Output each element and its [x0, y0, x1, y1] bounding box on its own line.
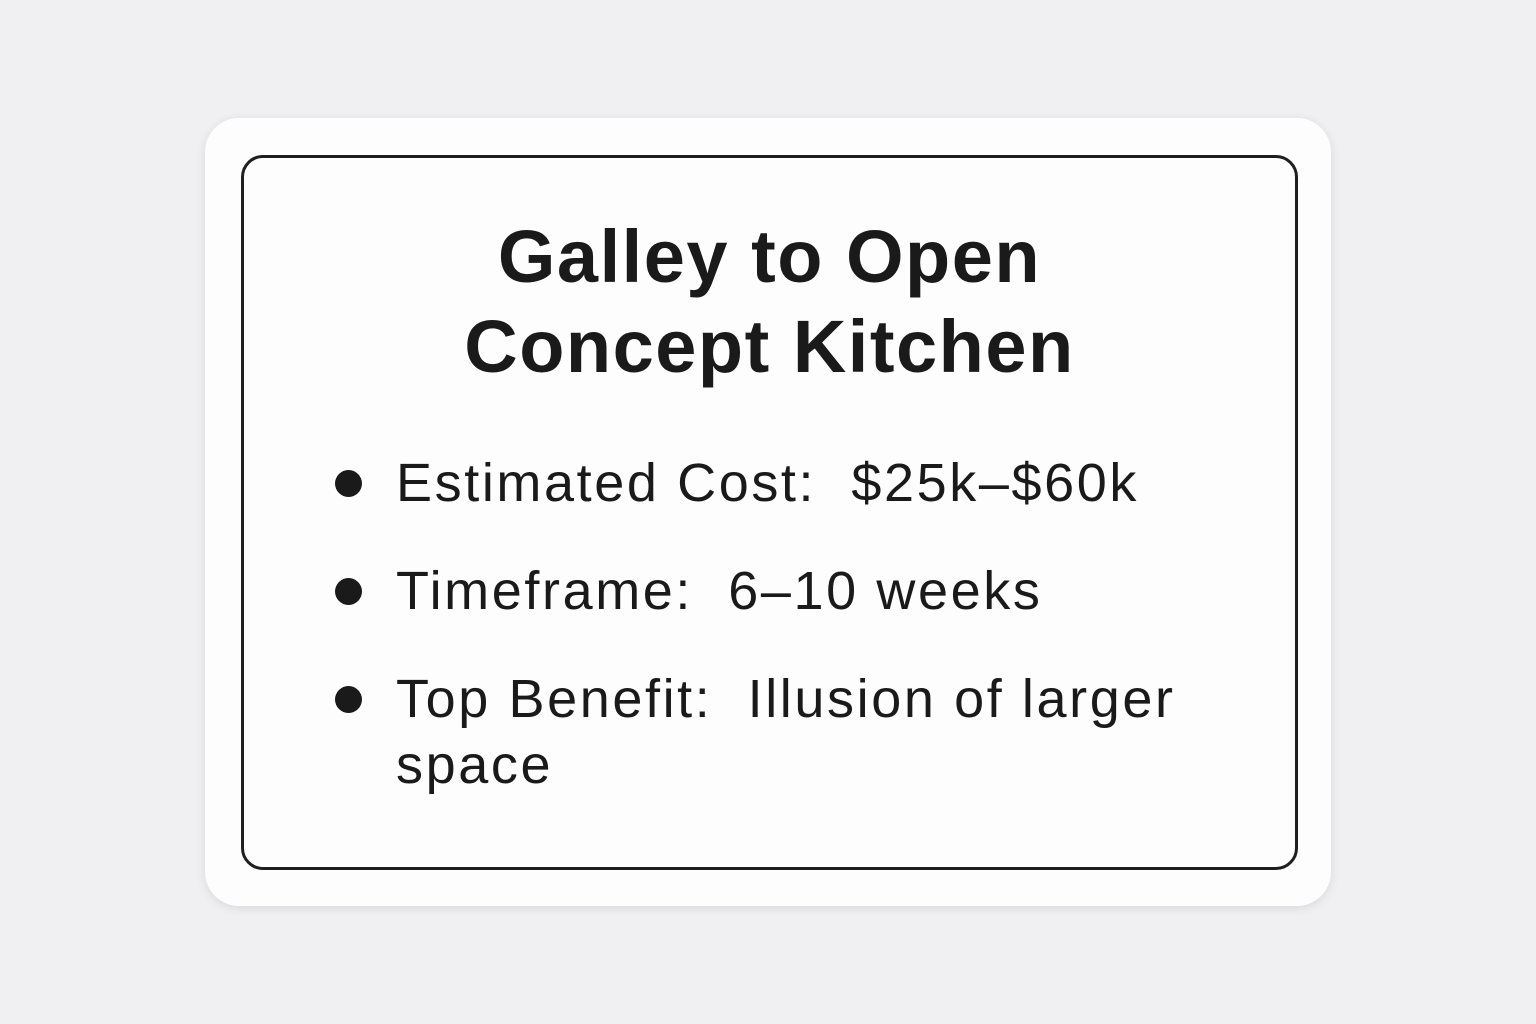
- title: Galley to Open: [498, 215, 1041, 298]
- text: timeframe: Timeframe: 6–10 weeks: [396, 561, 1042, 621]
- panel: card: [205, 118, 1331, 906]
- panel: inner border: [241, 155, 1298, 870]
- text: cost: Estimated Cost: $25k–$60k: [396, 453, 1139, 513]
- text: benefit: Top Benefit: Illusion of larger: [396, 669, 1176, 729]
- text: benefit: space: [396, 735, 553, 795]
- title: Concept Kitchen: [464, 305, 1075, 388]
- bullet: benefit: [335, 686, 362, 713]
- text: benefit: [396, 669, 1176, 795]
- bullet: timeframe: [335, 578, 362, 605]
- bullet: cost: [335, 470, 362, 497]
- title: [464, 215, 1075, 388]
